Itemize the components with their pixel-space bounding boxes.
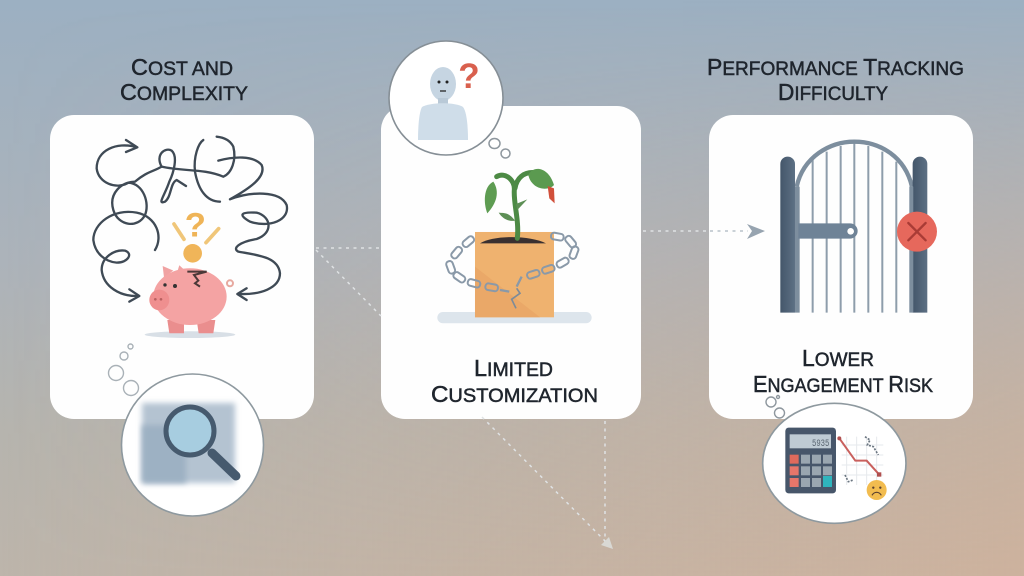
heading: performance tracking difficulty bbox=[707, 54, 964, 105]
panel: cost and complexity bbox=[50, 115, 314, 419]
panel: limited customization bbox=[381, 106, 641, 419]
coin and question mark: ? bbox=[185, 207, 206, 245]
panel: performance tracking bbox=[709, 115, 973, 419]
icon: magnifier bubble bbox=[122, 374, 264, 516]
soil bbox=[480, 237, 546, 243]
heading: performance tracking difficulty: PERFORMANCE TRACKING bbox=[707, 54, 964, 80]
heading: performance tracking difficulty: DIFFICULTY bbox=[778, 79, 888, 105]
calculator: 5935 bbox=[812, 438, 829, 449]
icon: person with question mark bubble bbox=[389, 41, 503, 155]
stem and leaves bbox=[485, 169, 555, 238]
icon: locked gate bbox=[780, 142, 937, 313]
arrow: diagonal end bbox=[601, 537, 613, 549]
pig bbox=[145, 265, 235, 338]
icon: tangled arrows bbox=[93, 137, 287, 302]
heading: limited customization: LIMITED bbox=[474, 355, 553, 381]
icon: person with question mark bubble: ? bbox=[458, 57, 480, 96]
heading: cost and complexity bbox=[120, 54, 248, 105]
pot bbox=[475, 232, 554, 317]
thought bubbles: calculator bbox=[766, 396, 784, 418]
right post bbox=[913, 157, 927, 313]
heading: cost and complexity: COST AND bbox=[131, 54, 233, 80]
heading: limited customization bbox=[431, 355, 598, 407]
falling chart bbox=[837, 436, 883, 485]
left post bbox=[780, 157, 795, 313]
heading: limited customization: CUSTOMIZATION bbox=[431, 381, 598, 407]
heading: lower engagement risk: LOWER bbox=[802, 345, 874, 371]
bars bbox=[813, 143, 896, 313]
sad face bbox=[867, 480, 887, 500]
heading: lower engagement risk bbox=[753, 345, 933, 397]
calculator bbox=[785, 428, 836, 493]
icon: calculator and falling chart bubble bbox=[763, 403, 906, 523]
no-entry badge bbox=[897, 212, 937, 252]
thought bubbles: person bbox=[489, 138, 510, 158]
arrow: to gate bbox=[747, 224, 765, 239]
heading: lower engagement risk: ENGAGEMENT RISK bbox=[753, 371, 933, 397]
heading: cost and complexity: COMPLEXITY bbox=[120, 79, 248, 105]
arch bbox=[797, 142, 912, 187]
icon: wilted plant in chained pot bbox=[437, 169, 592, 323]
dotted connector lines bbox=[316, 231, 748, 546]
icon: piggy bank with coin bbox=[145, 207, 235, 338]
latch bbox=[798, 223, 858, 239]
base shadow bbox=[437, 312, 592, 323]
thought bubbles: magnifier bbox=[108, 344, 138, 396]
chain bbox=[445, 232, 579, 308]
